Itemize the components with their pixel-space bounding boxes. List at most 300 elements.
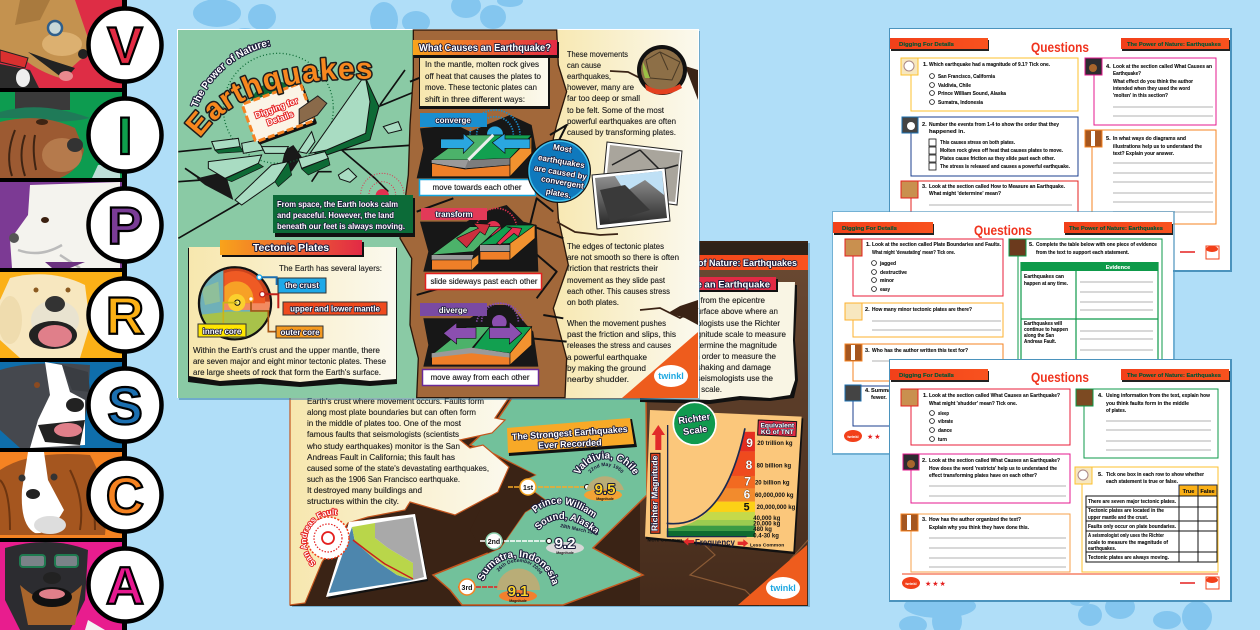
question 5 with evidence table: 5.: [1029, 242, 1034, 248]
question 1: 1.: [923, 62, 928, 68]
cracks and broken ground: [178, 53, 415, 238]
San Andreas Fault map: [299, 508, 428, 599]
paragraph: when the movement pushes: When the movement pushes: [567, 319, 666, 328]
true/false table: [1086, 485, 1217, 562]
question 2: 2.: [922, 458, 927, 464]
true/false table: Faults only occur on plate boundaries.: [1088, 524, 1176, 530]
header bar: Digging For Details: Digging For Details: [899, 373, 954, 379]
question 3: 3.: [922, 517, 927, 523]
true/false table: Tectonic plates are always moving.: [1088, 555, 1169, 561]
question 1: Look at the section called Plate Boundaries and Faults.: [872, 242, 1001, 248]
paragraph: these movements: [567, 50, 676, 137]
evidence table: happen at any time.: [1024, 281, 1068, 287]
numbers and TNT equivalents: 20 trillion kg: [757, 441, 793, 447]
paragraph: edges of tectonic plates: each other. This causes stress: [567, 287, 670, 296]
footer logo and stars: ★★: [867, 433, 882, 441]
San Andreas Fault badge: San Andreas Fault: [299, 508, 338, 567]
dog row A: pink: [0, 542, 123, 630]
title: The Power of Nature:: The Power of Nature:: [190, 40, 271, 107]
numbers and TNT equivalents: 20,000 kg: [753, 522, 781, 528]
question 2: Molten rock gives off heat that causes plates to move.: [940, 148, 1063, 154]
text box: mantle heat: move. These tectonic plates can: [425, 83, 537, 92]
diagram: diverge: [423, 303, 538, 367]
question 1: easy: [880, 287, 891, 293]
question 2: effect transforming plates have on each other?: [929, 473, 1037, 479]
question 4: you think faults form in the middle: [1106, 401, 1189, 407]
question 2: happened in.: [929, 129, 965, 135]
orange corner with twinkl logo: [738, 545, 807, 605]
question 2: How many minor tectonic plates are there?: [872, 307, 973, 313]
cream panel: how to measure an earthquake: and determine the magnitude: [673, 341, 778, 350]
question 1: sleep: [938, 411, 949, 417]
numbers and TNT equivalents: 40,000 kg: [753, 516, 781, 522]
cream panel: how to measure an earthquake: shaking and damage: [697, 363, 772, 372]
letter badge P: [88, 188, 162, 262]
question 3: How has the author organized the text?: [929, 517, 1021, 523]
paragraph: these movements: powerful earthquakes are often: [567, 117, 676, 126]
label: move away from each other: [422, 370, 538, 386]
numbers and TNT equivalents: 80 billion kg: [757, 464, 792, 470]
header bar: The Power of Nature: Earthquakes: The Power of Nature: Earthquakes: [1127, 42, 1221, 48]
2nd: Prince William Sound, Alaska: Prince William: [530, 496, 597, 519]
1st: Valdivia, Chile: [508, 450, 639, 501]
true/false table: scale to measure the magnitude of: [1088, 540, 1168, 546]
paragraph: these movements: to be felt. Some of the most: [567, 106, 665, 115]
text box: mantle heat: shift in three different ways:: [425, 95, 525, 104]
paragraph: edges of tectonic plates: movement as they slide past: [567, 276, 666, 285]
numbers and TNT equivalents: 480 kg: [753, 527, 772, 533]
question 3: 3.: [865, 348, 870, 354]
true/false table: upper mantle and the crust.: [1088, 515, 1148, 521]
header: What Causes an Earthquake?: [413, 40, 559, 58]
question 2: 2.: [922, 122, 927, 128]
paragraph: these movements: These movements: [567, 50, 628, 59]
dog row R: amber: [0, 272, 123, 358]
callout: most earthquakes are caused by convergent plates: Most: [552, 142, 573, 155]
evidence table: Evidence: [1106, 265, 1130, 271]
letter badge A: A: [106, 557, 144, 616]
label: move towards each other: move towards each other: [432, 183, 522, 192]
question 3: [845, 344, 1003, 381]
letter badge V: V: [107, 17, 143, 76]
broken slab: large: [310, 75, 379, 156]
tag: transform: transform: [435, 210, 473, 219]
1st: Valdivia, Chile: Magnitude: [596, 497, 614, 501]
tag: transform: [421, 208, 487, 220]
question 5 with evidence table: from the text to support each statement.: [1036, 250, 1129, 256]
green map regions: [433, 398, 647, 605]
header bar: The Power of Nature: Earthquakes: [1064, 222, 1173, 235]
question 4: Look at the section called What Causes an: [1113, 64, 1213, 70]
header: How to Measure an Earthquake: How to Measure an Earthquake: [629, 280, 770, 290]
cream panel: how to measure an earthquake: Waves spread from the epicentre: [647, 296, 766, 305]
numbers and TNT equivalents: 6: [744, 487, 751, 501]
question 1: minor: [880, 278, 895, 284]
label: the crust: [278, 278, 326, 293]
cream text area with fault text: It destroyed many buildings and: [307, 486, 422, 495]
question 2: Plates cause friction as they slide past each other.: [940, 156, 1055, 162]
question 5: 5.: [1106, 136, 1111, 142]
true/false table: earthquakes.: [1088, 546, 1116, 552]
Frequency axis label: Frequency: [695, 537, 736, 547]
heading: Tectonic Plates: [220, 240, 364, 257]
Richter Magnitude axis label: Richter Magnitude: [650, 455, 660, 531]
Frequency axis label: Less Common: [750, 542, 784, 548]
Richter Scale badge: Scale: [682, 424, 708, 437]
cream text area with fault text: in the middle of plates too. One of the most: [307, 419, 462, 428]
Frequency axis label: More Common: [647, 537, 682, 543]
letter badge S: [88, 368, 162, 442]
numbers and TNT equivalents: 7: [744, 475, 751, 489]
question 4: [1085, 58, 1216, 125]
2nd: Prince William Sound, Alaska: 9.2: [555, 535, 575, 552]
paragraph: these movements: far too deep or small: [567, 94, 640, 103]
question 4: Using information from the text, explain how: [1106, 393, 1211, 399]
1st: Valdivia, Chile: 22nd May 1960: [588, 462, 624, 474]
question 1: [845, 239, 1003, 296]
callout: most earthquakes are caused by convergent plates: convergent: [540, 174, 585, 191]
tectonic plates paragraph: [193, 346, 387, 377]
paragraph: edges of tectonic plates: The edges of tectonic plates: [567, 242, 664, 251]
cream panel: how to measure an earthquake: seismologists use the: [697, 374, 774, 383]
numbers and TNT equivalents: 9: [746, 436, 753, 450]
footer: logo, stars and mark: ★★★: [925, 580, 947, 588]
paragraph: when the movement pushes: past the friction and slips, this: [567, 330, 676, 339]
question 4: 4.: [1098, 393, 1103, 399]
question 2: This causes stress on both plates.: [940, 140, 1015, 146]
letter badge R: R: [106, 287, 144, 346]
heading: Tectonic Plates: Tectonic Plates: [253, 242, 329, 254]
question 4: 4.: [865, 388, 870, 394]
header strip: The Power of Nature: Earthquakes: [640, 255, 808, 270]
diagram: transform: [420, 205, 538, 272]
orange corner with twinkl logo: twinkl: [658, 371, 684, 381]
true/false table: There are seven major tectonic plates.: [1088, 499, 1176, 505]
question 2: [902, 117, 1078, 176]
dog row V: red: [0, 0, 123, 90]
footer: logo, stars and mark: [902, 574, 1219, 589]
footer logo: [1180, 246, 1219, 259]
Equivalent KG of TNT heading: [758, 420, 797, 437]
header bar: The Power of Nature: Earthquakes: The Power of Nature: Earthquakes: [1127, 373, 1221, 379]
question 5 with true/false table: 5.: [1098, 472, 1103, 478]
footer: logo, stars and mark: twinkl: [905, 581, 917, 586]
question 5: text? Explain your answer.: [1113, 151, 1174, 157]
true/false table: False: [1200, 489, 1215, 495]
tag: diverge: diverge: [439, 306, 468, 315]
heading: Questions: Questions: [1031, 39, 1089, 55]
header bar: The Power of Nature: Earthquakes: [1121, 38, 1230, 51]
question 1: dance: [938, 428, 952, 434]
paragraph: when the movement pushes: a powerful earthquake: [567, 353, 648, 362]
question 5 with true/false table: Tick one box in each row to show whether: [1106, 472, 1205, 478]
header bar: Digging For Details: Digging For Details: [899, 42, 954, 48]
question 3: [901, 181, 1078, 226]
3rd: Sumatra, Indonesia: Sumatra, Indonesia: [477, 549, 558, 586]
header bar: Digging For Details: [890, 369, 989, 382]
Richter Scale badge: [673, 402, 716, 445]
heading: The Strongest Earthquakes Ever Recorded: [507, 418, 637, 456]
cream text area with fault text: famous faults that seismologists (scientists: [307, 430, 459, 439]
header bar: The Power of Nature: Earthquakes: The Power of Nature: Earthquakes: [1069, 226, 1163, 232]
numbers and TNT equivalents: 8: [746, 458, 753, 472]
letter badge V: [88, 8, 162, 82]
question 3: 3.: [922, 184, 927, 190]
question 3: What might 'determine' mean?: [929, 191, 1002, 197]
evidence table: Earthquakes can: [1024, 274, 1065, 280]
earth layers diagram: [198, 267, 278, 342]
question 5: In what ways do diagrams and: [1113, 136, 1187, 142]
tectonic plates paragraph: are seven major and eight minor tectonic plates. These: [193, 357, 387, 366]
paragraph: when the movement pushes: [567, 319, 676, 384]
letter badge I: I: [118, 107, 132, 166]
numbers and TNT equivalents: 0.4-30 kg: [753, 534, 779, 540]
crack lines on brown: [690, 536, 808, 605]
3rd: Sumatra, Indonesia: Magnitude: [509, 599, 527, 603]
rock circle image: [637, 45, 687, 95]
title: Earthquakes: Earthquakes: [184, 56, 373, 138]
question 5: [1085, 130, 1216, 224]
paragraph: edges of tectonic plates: are not smooth so there is often: [567, 253, 679, 262]
label: the crust: the crust: [285, 281, 319, 290]
cream panel: how to measure an earthquake: intensity scale.: [670, 385, 722, 394]
Equivalent KG of TNT heading: Equivalent: [760, 422, 795, 429]
2nd: Prince William Sound, Alaska: 28th March 1964: [560, 523, 599, 537]
text box: mantle heat: In the mantle, molten rock gives: [425, 60, 539, 69]
true/false table: Tectonic plates are located in the: [1088, 508, 1164, 514]
paragraph: edges of tectonic plates: friction that restricts their: [567, 264, 658, 273]
evidence table: Andreas Fault.: [1024, 339, 1056, 345]
worksheet 1: questions: [889, 28, 1232, 272]
question 1: Look at the section called What Causes an Earthquake?: [929, 393, 1061, 399]
label: inner core: [198, 324, 246, 337]
tag: converge: [420, 113, 487, 127]
header: How to Measure an Earthquake: [629, 277, 778, 292]
true/false table: A seismologist only uses the Richter: [1088, 533, 1165, 539]
header bar: Digging For Details: Digging For Details: [842, 226, 897, 232]
numbers and TNT equivalents: 5: [744, 501, 750, 513]
cream text area with fault text: structures within the city.: [307, 497, 399, 506]
question 4: of plates.: [1106, 408, 1126, 414]
orange corner with twinkl logo: twinkl: [770, 583, 796, 593]
callout: most earthquakes are caused by convergent plates: are caused by: [533, 163, 588, 182]
digging for details badge: Digging for: [253, 95, 300, 120]
letter badge C: C: [106, 467, 144, 526]
label: move away from each other: move away from each other: [430, 373, 530, 382]
dog row P: purple: [0, 182, 123, 268]
question 1: vibrate: [938, 419, 953, 425]
question 4: What effect do you think the author: [1113, 79, 1194, 85]
question 1: What might 'devastating' mean? Tick one.: [872, 250, 955, 256]
dotted ring and epicentre: [223, 53, 333, 163]
crack wedges at the paper edge: [668, 66, 698, 325]
cream panel: how to measure an earthquake: In order to measure the: [693, 352, 777, 361]
paragraph: when the movement pushes: nearby shudder.: [567, 375, 629, 384]
letter badge A: [88, 548, 162, 622]
cream text area with fault text: Andreas Fault in California; this fault has: [307, 453, 455, 462]
orange corner with twinkl logo: [622, 332, 698, 398]
question 4: intended when they used the word: [1113, 86, 1190, 92]
question 3: Explain why you think they have done this.: [929, 525, 1029, 531]
question 4: 'molten' in this section?: [1113, 93, 1169, 99]
label: move towards each other: [420, 180, 536, 196]
2nd: Prince William Sound, Alaska: [480, 496, 600, 555]
broken slabs: small: [208, 122, 402, 205]
letter badge S: S: [107, 377, 143, 436]
question 4: fewer.: [871, 395, 887, 401]
photo: cracked ground: [602, 142, 682, 205]
1st: Valdivia, Chile: 9.5: [595, 481, 615, 498]
question 2: The stress is released and causes a powerful earthquake.: [940, 164, 1070, 170]
question 4: Earthquake?: [1113, 71, 1141, 77]
3rd: Sumatra, Indonesia: [458, 549, 558, 603]
poster page 2: how to measure, strongest earthquakes, Richter scale: [289, 241, 810, 607]
cream text area with fault text: [290, 396, 510, 605]
intro banner: [273, 195, 415, 237]
numbers and TNT equivalents: 20,000,000 kg: [757, 505, 796, 511]
letter badge P: P: [107, 197, 143, 256]
photo: damaged building: [592, 168, 670, 229]
VIPERS reading strip with dogs: [0, 0, 162, 630]
panel: tectonic plates: The Earth has several layers:: [279, 264, 382, 273]
cream panel: how to measure an earthquake: [640, 282, 798, 404]
paragraph: edges of tectonic plates: on both plates.: [567, 298, 619, 307]
evidence table: along the San: [1024, 333, 1054, 339]
numbers and TNT equivalents: [744, 436, 796, 540]
question 1: jagged: [879, 261, 897, 267]
callout: most earthquakes are caused by convergent plates: plates.: [545, 187, 572, 200]
Equivalent KG of TNT heading: KG of TNT: [761, 429, 794, 436]
evidence table: continue to happen: [1024, 327, 1068, 333]
tag: diverge: [420, 303, 487, 316]
label: outer core: [276, 326, 323, 338]
2nd: Prince William Sound, Alaska: Magnitude: [556, 551, 574, 555]
brown fault column: [400, 30, 568, 398]
panel: tectonic plates: [188, 240, 397, 387]
header bar: Digging For Details: [833, 222, 934, 235]
label: upper and lower mantle: [283, 302, 387, 315]
label: slide sideways past each other: [426, 274, 542, 290]
question 1: 1.: [923, 393, 928, 399]
question 4: [845, 385, 1003, 426]
cream text area with fault text: caused some of the state's devastating earthquakes,: [307, 464, 489, 473]
question 1: San Francisco, California: [938, 74, 996, 80]
cream text area with fault text: Earth's crust where movement occurs. Faults form: [307, 397, 484, 406]
worksheet 3: questions: [889, 359, 1232, 602]
intro banner: From space, the Earth looks calm: [277, 200, 398, 209]
label: slide sideways past each other: slide sideways past each other: [430, 277, 538, 286]
diagram: converge: [417, 110, 537, 178]
callout: most earthquakes are caused by convergent plates: [527, 139, 591, 203]
Richter Magnitude axis label: [650, 425, 665, 533]
question 2: Number the events from 1-4 to show the order that they: [929, 122, 1060, 128]
question 2: [903, 454, 1070, 503]
heading: The Strongest Earthquakes Ever Recorded: The Strongest Earthquakes: [512, 424, 628, 442]
intro banner: and peaceful. However, the land: [277, 211, 394, 220]
question 1: [901, 389, 1070, 445]
question 1: Sumatra, Indonesia: [938, 100, 984, 106]
callout: most earthquakes are caused by convergent plates: earthquakes: [537, 153, 586, 170]
digging for details badge: Details: [265, 109, 295, 128]
question 2: How does the word 'restricts' help us to understand the: [929, 466, 1057, 472]
header bar: Digging For Details: [890, 38, 989, 51]
paragraph: these movements: however, many are: [567, 83, 635, 92]
question 3: Look at the section called How to Measure an Earthquake.: [929, 184, 1065, 190]
Richter Scale badge: Richter: [678, 411, 711, 426]
question 2: 2.: [865, 307, 870, 313]
tectonic plates paragraph: Within the Earth's crust and the upper mantle, there: [193, 346, 381, 355]
3rd: Sumatra, Indonesia: 9.1: [508, 583, 528, 600]
text box: mantle heat: off heat that causes the plates to: [425, 72, 542, 81]
cream text area with fault text: who study earthquakes) monitor is the San: [306, 442, 460, 451]
question 1: Prince William Sound, Alaska: [938, 91, 1007, 97]
question 1: turn: [938, 437, 947, 443]
1st: Valdivia, Chile: Valdivia, Chile: [572, 450, 639, 476]
evidence table: Earthquakes will: [1024, 321, 1062, 327]
heading: The Strongest Earthquakes Ever Recorded: Ever Recorded: [538, 437, 602, 451]
intro banner: beneath our feet is always moving.: [277, 222, 405, 231]
heading: Questions: Questions: [974, 222, 1032, 238]
question 4: Summarise the text in 20 words or: [871, 388, 963, 394]
label: inner core: inner core: [203, 327, 242, 336]
cream right column: [545, 30, 698, 398]
2nd: Prince William Sound, Alaska: Sound, Alaska: [534, 511, 600, 536]
label: outer core: outer core: [280, 328, 320, 337]
question 1: destructive: [880, 270, 907, 276]
cream panel: how to measure an earthquake: Seismologists use the Richter: [675, 319, 780, 328]
paragraph: when the movement pushes: releases the stress and causes: [567, 341, 671, 350]
text box: mantle heat: [419, 57, 550, 109]
question 4: 4.: [1106, 64, 1111, 70]
paragraph: edges of tectonic plates: [567, 242, 679, 307]
question 5 with true/false table: each statement is true or false.: [1106, 479, 1178, 485]
question 1: 1.: [866, 242, 871, 248]
question 1: [901, 58, 1078, 111]
footer logo and stars: twinkl: [847, 434, 859, 439]
letter badge I: [88, 98, 162, 172]
question 5 with evidence table: Complete the table below with one piece of evidence: [1036, 242, 1157, 248]
poster page 1: Earthquakes: [177, 29, 700, 400]
tag: converge: converge: [435, 116, 471, 125]
numbers and TNT equivalents: 20 billion kg: [755, 481, 790, 487]
cream panel: how to measure an earthquake: which is the surface above where an: [648, 307, 778, 316]
dog row I: green: [0, 92, 123, 178]
cream panel: how to measure an earthquake: magnitude scale to measure: [686, 330, 787, 339]
question 5: illustrations help us to understand the: [1113, 144, 1202, 150]
dog row S: blue: [0, 362, 123, 448]
paragraph: these movements: caused by transforming plates.: [567, 128, 676, 137]
paragraph: these movements: can cause: [567, 61, 602, 70]
numbers and TNT equivalents: 60,000,000 kg: [755, 493, 794, 499]
cream text area with fault text: along most plate boundaries but can often form: [307, 408, 476, 417]
3rd: Sumatra, Indonesia: 3rd: [462, 585, 472, 592]
2nd: Prince William Sound, Alaska: 2nd: [488, 539, 500, 546]
heading: Questions: Questions: [1031, 369, 1089, 385]
question 3: Who has the author written this text for?: [872, 348, 969, 354]
cracks in cream paper: [557, 71, 698, 318]
question 1: Valdivia, Chile: [938, 83, 971, 89]
evidence table: [1021, 262, 1158, 360]
question 5 with evidence table: [1009, 239, 1162, 360]
paragraph: these movements: earthquakes,: [567, 72, 611, 81]
chart: Richter scale: [645, 402, 803, 554]
question 2: [845, 303, 1003, 337]
worksheet 2: questions: [832, 211, 1175, 455]
label: upper and lower mantle: upper and lower mantle: [290, 304, 380, 314]
question 5 with true/false table: [1075, 467, 1218, 572]
question 4: [1076, 389, 1218, 458]
question 2: Look at the section called What Causes an Earthquake?: [929, 458, 1061, 464]
